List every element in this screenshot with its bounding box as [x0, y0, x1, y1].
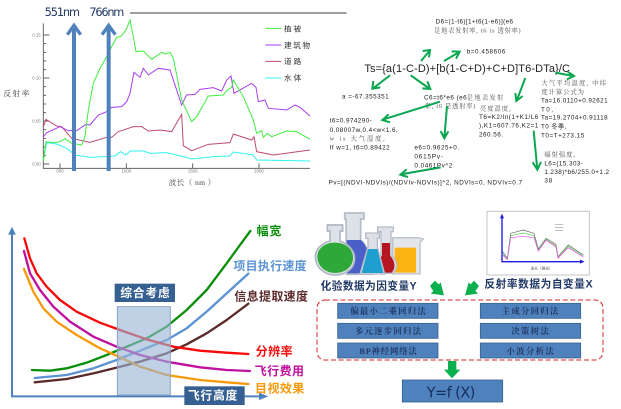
arrow: 766nm: [102, 25, 115, 171]
formula L6: 38: [544, 178, 553, 185]
formula Ta: T0 冬季,: [541, 121, 567, 130]
formula D6: [434, 19, 521, 35]
method: decision tree: 决策树法: [511, 326, 549, 336]
method: wavelet analysis: 小波分析法: [506, 346, 554, 356]
x axis tick labels: 500: [56, 168, 64, 173]
x axis tick labels: 1500: [188, 168, 198, 173]
thumbnail: reflectance spectrum chart: 波长（微米）: [531, 266, 553, 271]
y axis tick labels: 0.00: [32, 162, 41, 167]
formula T6: 260.56.: [479, 132, 503, 139]
curve: resolution: [24, 238, 248, 354]
highlighted range: [117, 307, 170, 395]
label box: overall consideration: 综合考虑: [120, 286, 170, 300]
arrow: Y data into methods: [430, 281, 444, 295]
x axis tick labels: [56, 168, 264, 173]
curve: water: [43, 143, 310, 161]
method: stepwise regression: 多元逐步回归法: [355, 326, 422, 336]
formula Ta: 度计算公式为: [541, 87, 584, 96]
curve labels: 项目执行速度: [233, 258, 307, 273]
result box: Y=f(X): [402, 380, 503, 402]
legend: 道路: [284, 56, 302, 66]
method: wavelet analysis: [480, 343, 581, 358]
formula t6: If w=1, t6=0.89422: [330, 144, 390, 151]
formula C6: 是地表发射: [467, 93, 504, 102]
curve: visual effect: [24, 269, 248, 384]
label box: overall consideration: [115, 284, 175, 302]
formula Ta: [541, 78, 608, 139]
formula Ta: T0,: [541, 106, 553, 113]
green arrows between formulas: [372, 50, 574, 177]
formula t6: w is 大气湿度,: [330, 134, 385, 143]
formula Ta: Ta=19.2704+0.91118: [541, 115, 608, 122]
arrow: X data into methods: [465, 281, 479, 295]
formula e6: e6=0.9625+0.: [414, 144, 459, 151]
formula T6: ),K1=607.76,K2=1: [479, 123, 539, 130]
label: independent variable X: 反射率数据为自变量X: [484, 278, 594, 291]
formula L6: 辐射强度,: [544, 150, 575, 159]
formula D6: 是地表发射率, t6 is 透射率): [434, 26, 521, 35]
formula L6: [544, 150, 609, 185]
curve labels: [233, 223, 308, 396]
label: dependent variable Y: 化验数据为因变量Y: [321, 280, 417, 293]
formula L6: L6=(15.303-: [544, 160, 583, 167]
label box: flight altitude: 飞行高度: [188, 389, 238, 403]
label box: flight altitude: [184, 386, 245, 405]
panel: land surface temperature formulas: [329, 19, 609, 187]
method: PCR: [480, 303, 581, 318]
method: PLS regression: 偏最小二乘回归法: [350, 306, 426, 316]
curve: swath width: [32, 231, 250, 371]
curve: project speed: [35, 274, 248, 378]
method: PLS regression: [338, 303, 438, 318]
curve labels: 飞行费用: [255, 363, 304, 378]
arrow: methods to model: [444, 361, 460, 378]
y axis tick labels: 0.05: [32, 119, 41, 124]
y axis title: 反射率: [3, 88, 30, 98]
legend: 建筑物: [284, 40, 310, 50]
y axis tick labels: [32, 33, 41, 167]
formula Ta: 大气平均温度, 中纬: [541, 78, 607, 87]
y axis tick labels: 0.10: [32, 76, 41, 81]
x axis tick labels: 1000: [122, 168, 132, 173]
method: stepwise regression: [338, 323, 438, 338]
panel: regression modelling flow: [315, 211, 603, 402]
chart axes: [43, 13, 347, 168]
formula e6: 0.0461Pv^2: [414, 162, 453, 169]
curve labels: 幅宽: [257, 223, 281, 238]
curve: information extraction speed: [35, 304, 248, 382]
method: BP neural network: [338, 343, 438, 358]
formula b: b=0.458606: [467, 49, 506, 56]
curve: building: [43, 68, 310, 137]
formula T6: [479, 103, 539, 139]
curve labels: 分辨率: [256, 343, 293, 358]
formula T6: 亮度温度,: [480, 103, 511, 112]
formula e6: [414, 144, 459, 169]
formula Ta: T0=T+273.15: [541, 132, 585, 139]
curve labels: 目视效果: [255, 381, 304, 396]
label: 766nm: 766nm: [89, 5, 124, 19]
formula T6: T6=K2/ln(1+K1/L6: [479, 114, 539, 121]
result box: Y=f(X): Y=f (X): [426, 384, 475, 401]
icon: chemistry flasks: [315, 213, 423, 275]
panel: reflectance spectra chart: [0, 0, 347, 200]
dashed method container: [317, 300, 603, 360]
method: decision tree: [480, 323, 581, 338]
curve labels: 信息提取速度: [234, 288, 308, 303]
y axis tick labels: 0.15: [32, 33, 41, 38]
formula t6: 0.08007w,0.4<w<1.6,: [330, 127, 398, 134]
formula C6: 率, t6 是透射率): [425, 101, 475, 110]
formula C6: [424, 93, 504, 110]
curve: vegetation: [43, 20, 310, 162]
formula L6: 1.238)*b6/255.0+1.2: [544, 169, 609, 176]
axes: [9, 228, 267, 400]
main formula: Ts={a(1-C-D)+[b(1-C+D)+C+D]T6-DTa}/C: [364, 63, 570, 75]
formula a: a =-67.355351: [342, 94, 389, 101]
formula Ta: Ta=16.0110+0.92621: [541, 98, 608, 105]
panel: flight altitude trade-off chart: [9, 223, 308, 405]
formula e6: 0615Pv-: [414, 154, 443, 161]
curve: road: [43, 114, 310, 155]
x axis title: 波长（ nm ）: [169, 177, 215, 187]
x axis tick labels: 2000: [254, 168, 264, 173]
label: 551nm: 551nm: [45, 5, 80, 19]
formula t6: t6=0.974290-: [330, 118, 372, 125]
legend: 水体: [284, 73, 302, 83]
arrow: 551nm: [67, 25, 81, 171]
formula t6: [330, 118, 398, 151]
curve: flight cost: [24, 251, 250, 371]
legend: [265, 23, 310, 83]
thumbnail: reflectance spectrum chart: [487, 211, 589, 275]
formula D6: D6=(1-t6)[1+t6(1-e6)](e6: [436, 19, 513, 26]
formula C6: C6=t6*e6 (e6: [424, 95, 467, 102]
legend: 植被: [284, 23, 302, 33]
formula Pv: Pv=[(NDVI-NDVIs)/(NDVIv-NDVIs)]^2, NDVIs=0, NDVIv=0.7: [329, 180, 522, 187]
method: BP neural network: BP神经网络法: [359, 346, 417, 356]
method: PCR: 主成分回归法: [502, 306, 559, 316]
